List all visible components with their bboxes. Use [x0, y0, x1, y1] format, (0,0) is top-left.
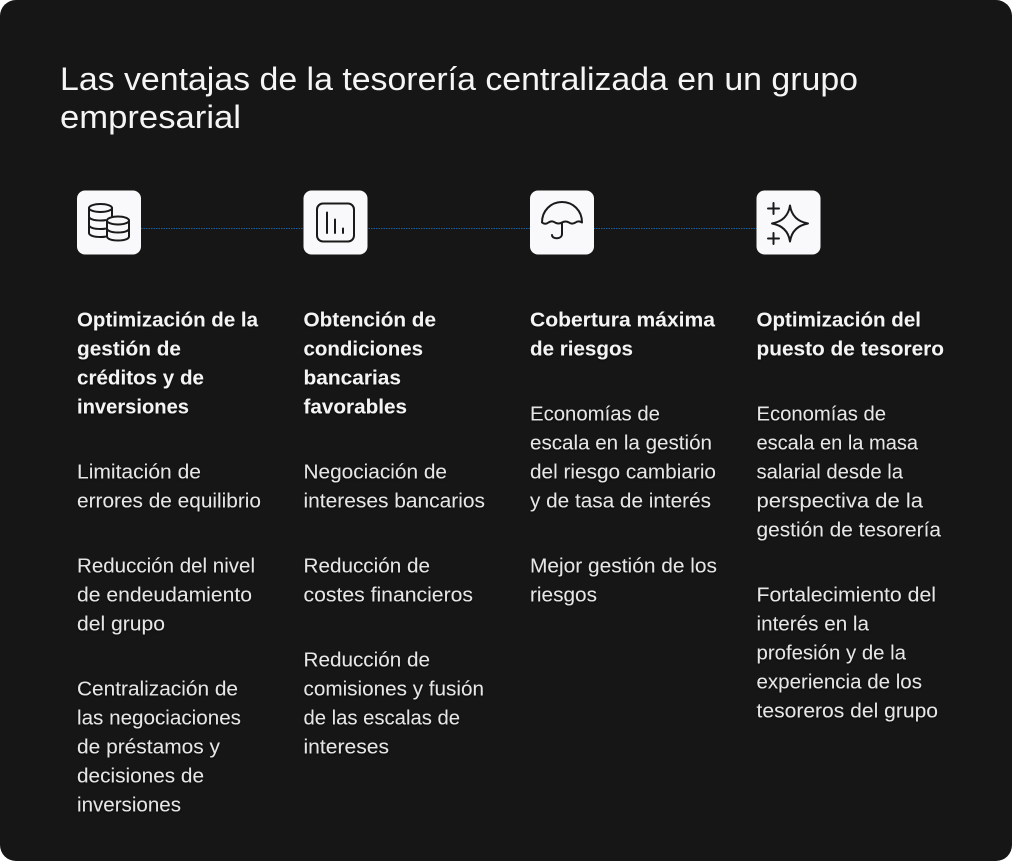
- text: economías de escala masa salarial: perspectiva de la: [756, 490, 924, 512]
- text: limitación de errores: errores de equilibrio: [77, 490, 261, 512]
- heading: condiciones bancarias: Obtención de: [304, 310, 436, 332]
- heading: puesto de tesorero: puesto de tesorero: [756, 338, 944, 360]
- heading: créditos e inversiones: inversiones: [77, 396, 189, 418]
- text: centralización de negociaciones: de préstamos y: [77, 736, 220, 758]
- text: mejor gestión: Mejor gestión de los: [530, 556, 717, 578]
- heading: puesto de tesorero: [756, 310, 944, 360]
- text: reducción del endeudamiento: del grupo: [77, 614, 165, 636]
- heading: condiciones bancarias: [304, 310, 436, 418]
- text: centralización de negociaciones: Centralización de: [77, 678, 238, 700]
- text: centralización de negociaciones: inversiones: [77, 794, 181, 816]
- text: reducción de comisiones: [304, 650, 484, 758]
- text: reducción del endeudamiento: [77, 556, 255, 636]
- text: economías de escala riesgo: [530, 404, 716, 512]
- text: economías de escala masa salarial: [756, 404, 942, 542]
- heading: cobertura de riesgos: [530, 310, 716, 360]
- text: fortalecimiento: experiencia de los: [756, 672, 922, 694]
- column 3: [530, 310, 717, 606]
- text: reducción del endeudamiento: Reducción del nivel: [77, 556, 255, 578]
- column 4: [756, 310, 944, 722]
- text: fortalecimiento: interés en la: [756, 614, 870, 636]
- text: mejor gestión: riesgos: [530, 584, 597, 606]
- heading: condiciones bancarias: bancarias: [304, 368, 401, 390]
- connector line: [141, 228, 757, 230]
- text: limitación de errores: [77, 462, 261, 512]
- heading: cobertura de riesgos: Cobertura máxima: [530, 310, 716, 332]
- text: economías de escala riesgo: y de tasa de interés: [530, 490, 711, 512]
- text: centralización de negociaciones: las negociaciones: [77, 708, 241, 730]
- text: reducción de comisiones: Reducción de: [304, 650, 430, 672]
- text: fortalecimiento: profesión y de la: [756, 642, 907, 664]
- text: reducción de costes: [304, 556, 473, 606]
- heading: condiciones bancarias: condiciones: [304, 338, 423, 360]
- column 1: [77, 310, 261, 816]
- title: [60, 61, 858, 135]
- text: economías de escala riesgo: del riesgo cambiario: [530, 462, 716, 484]
- icon: sparkle: [756, 190, 820, 254]
- text: economías de escala masa salarial: escala en la masa: [756, 432, 919, 454]
- text: negociación de intereses: intereses bancarios: [304, 490, 485, 512]
- text: fortalecimiento: Fortalecimiento del: [756, 584, 936, 606]
- heading: cobertura de riesgos: de riesgos: [530, 338, 633, 360]
- text: mejor gestión: [530, 556, 717, 606]
- text: negociación de intereses: Negociación de: [304, 462, 447, 484]
- text: fortalecimiento: tesoreros del grupo: [756, 700, 938, 722]
- text: economías de escala masa salarial: Economías de: [756, 404, 886, 426]
- text: economías de escala riesgo: Economías de: [530, 404, 660, 426]
- text: reducción de costes: costes financieros: [304, 584, 473, 606]
- heading: créditos e inversiones: gestión de: [77, 338, 181, 360]
- column 2: [304, 310, 485, 758]
- text: fortalecimiento: [756, 584, 938, 722]
- text: reducción de comisiones: comisiones y fusión: [304, 678, 484, 700]
- heading: condiciones bancarias: favorables: [304, 396, 407, 418]
- text: centralización de negociaciones: [77, 678, 241, 816]
- heading: créditos e inversiones: [77, 310, 259, 418]
- text: economías de escala riesgo: escala en la gestión: [530, 432, 712, 454]
- heading: puesto de tesorero: Optimización del: [756, 310, 921, 332]
- text: reducción del endeudamiento: de endeudamiento: [77, 584, 252, 606]
- icon: coins stack: [77, 190, 141, 254]
- text: reducción de costes: Reducción de: [304, 556, 430, 578]
- text: reducción de comisiones: de las escalas de: [304, 708, 460, 730]
- text: centralización de negociaciones: decisiones de: [77, 766, 204, 788]
- text: negociación de intereses: [304, 462, 485, 512]
- icon: umbrella: [530, 190, 594, 254]
- text: reducción de comisiones: intereses: [304, 736, 389, 758]
- heading: créditos e inversiones: créditos y de: [77, 368, 204, 390]
- text: limitación de errores: Limitación de: [77, 462, 201, 484]
- title: empresarial: [60, 99, 241, 135]
- title: Las ventajas de la tesorería centralizada en un grupo: [60, 61, 858, 97]
- icon: bar chart: [304, 190, 368, 254]
- text: economías de escala masa salarial: gestión de tesorería: [756, 520, 942, 542]
- heading: créditos e inversiones: Optimización de la: [77, 310, 259, 332]
- text: economías de escala masa salarial: salarial desde la: [756, 462, 904, 484]
